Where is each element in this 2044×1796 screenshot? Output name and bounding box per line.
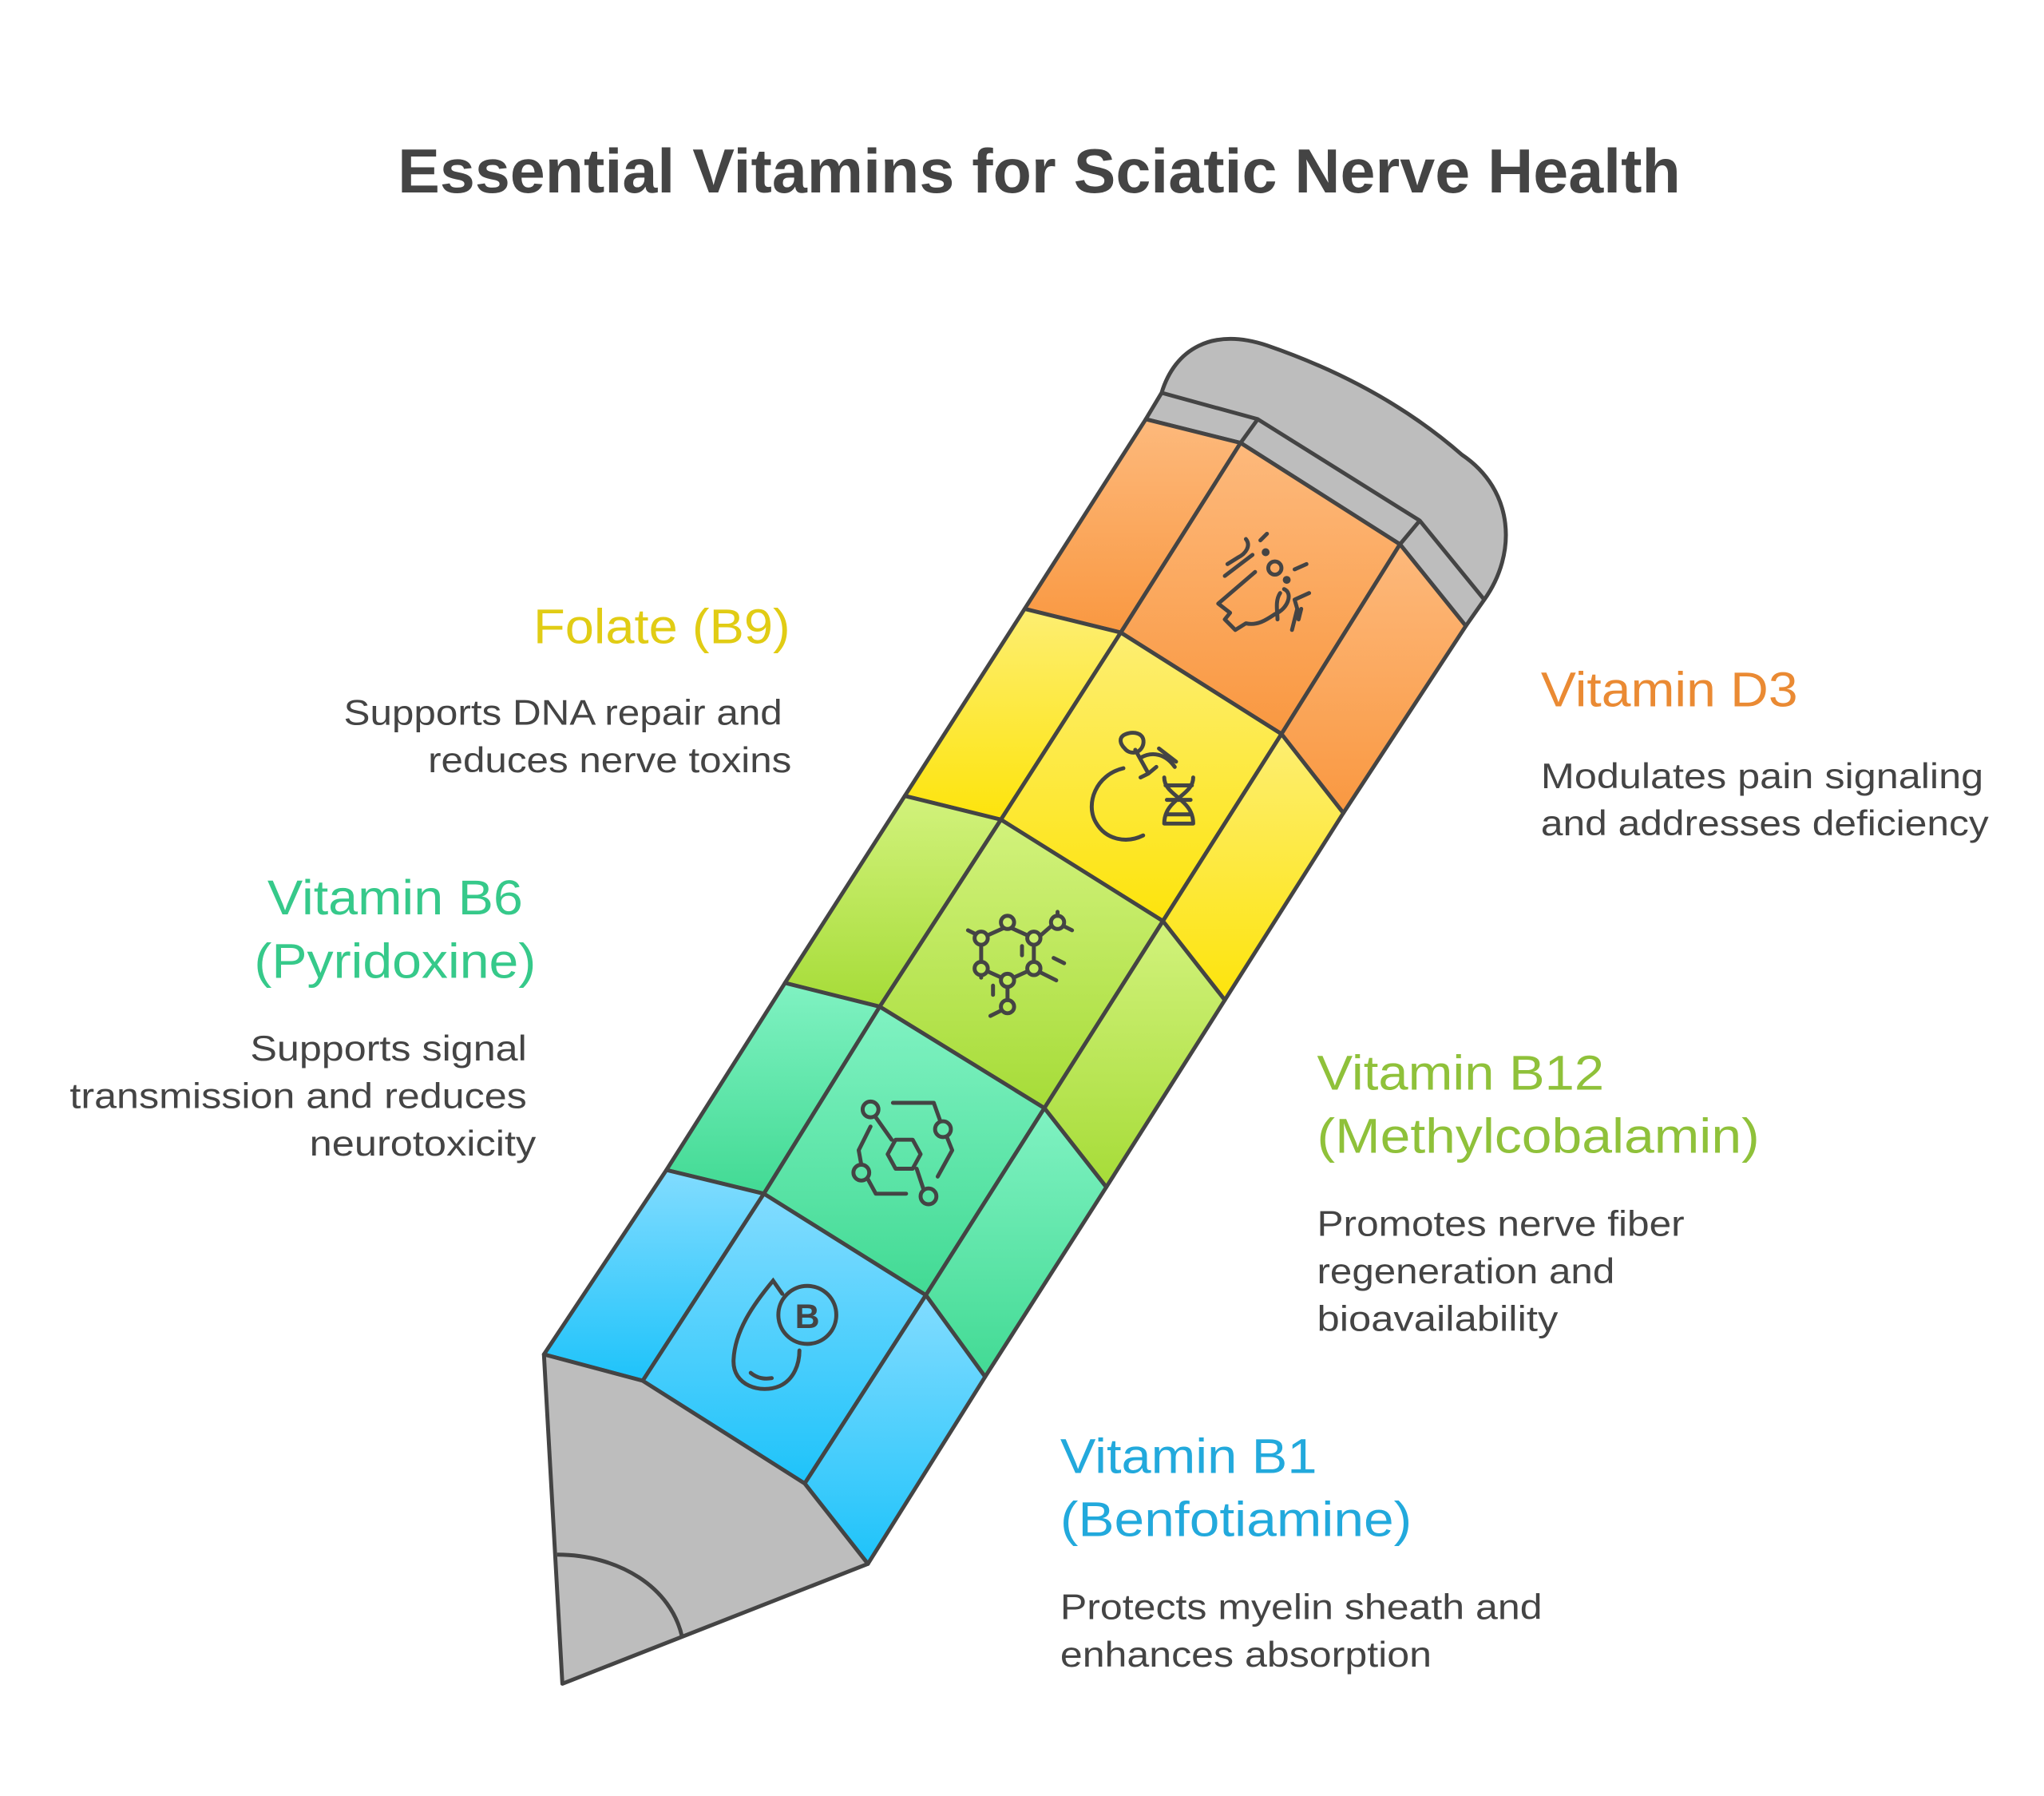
label: Vitamin B6: (Pyridoxine): [254, 934, 536, 988]
label: Folate (B9): Supports DNA repair and: [344, 694, 782, 733]
icon: vitamin B drop: [734, 1281, 836, 1389]
segment: B6 (green): [667, 983, 1107, 1377]
label: Vitamin B12: (Methylcobalamin): [1317, 1109, 1760, 1164]
segment: vitamin D3 (orange): [1024, 419, 1466, 813]
icon: hexagon network: [854, 1101, 953, 1204]
icon: apple with DNA: [1091, 733, 1193, 839]
icon: vitamin B drop: B: [795, 1298, 820, 1336]
label: Vitamin B6: transmission and reduces: [69, 1077, 527, 1116]
label: Vitamin B6: [69, 870, 537, 1164]
label: Vitamin B6: neurotoxicity: [310, 1124, 537, 1164]
icon: nerve pain hand: [1218, 533, 1309, 630]
label: Vitamin B12: Vitamin B12: [1317, 1045, 1604, 1100]
label: Vitamin B12: [1317, 1045, 1760, 1338]
label: Vitamin B1: (Benfotiamine): [1060, 1493, 1412, 1547]
segment: B12 (lime): [785, 796, 1225, 1187]
pencil cap: [1146, 339, 1506, 626]
label: Vitamin B1: Protects myelin sheath and: [1060, 1588, 1543, 1628]
label: Vitamin B6: Supports signal: [250, 1029, 527, 1068]
label: Vitamin B1: Vitamin B1: [1060, 1429, 1317, 1483]
segment: folate (yellow): [905, 609, 1343, 1000]
label: Folate (B9): reduces nerve toxins: [428, 741, 791, 780]
icon: molecule: [968, 912, 1072, 1016]
label: Vitamin B12: Promotes nerve fiber: [1317, 1205, 1685, 1244]
pencil tip: [544, 1354, 868, 1683]
label: Vitamin D3: Vitamin D3: [1541, 662, 1798, 716]
label: Vitamin B1: enhances absorption: [1060, 1635, 1432, 1675]
label: Vitamin B1: [1060, 1429, 1543, 1675]
label: Vitamin B12: regeneration and: [1317, 1252, 1614, 1291]
label: Vitamin B12: bioavailability: [1317, 1299, 1559, 1338]
label: Vitamin B6: Vitamin B6: [267, 870, 523, 925]
label: Folate (B9): Folate (B9): [533, 599, 790, 653]
pencil: [544, 339, 1506, 1683]
label: Folate (B9): [344, 599, 791, 780]
label: Vitamin D3: [1541, 663, 1990, 843]
label: Vitamin D3: Modulates pain signaling: [1541, 757, 1983, 796]
segment: B1 (blue): [544, 1170, 985, 1564]
label: Vitamin D3: and addresses deficiency: [1541, 804, 1990, 843]
title: Essential Vitamins for Sciatic Nerve Health: [398, 137, 1681, 206]
